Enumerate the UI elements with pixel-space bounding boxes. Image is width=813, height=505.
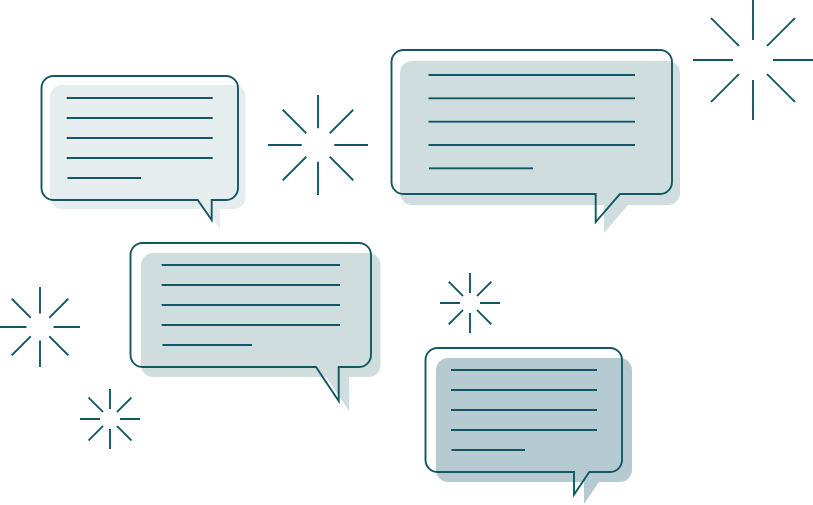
sparkle: centre top (268, 95, 368, 195)
bubble outline (130, 243, 371, 401)
sparkle: bottom left small (80, 389, 140, 449)
bubble shadow (436, 358, 632, 504)
speech bubble: top centre, large (392, 50, 680, 233)
bubble outline (392, 50, 672, 222)
sparkle: left (0, 287, 80, 367)
speech bubble: bottom right, darkest (426, 348, 632, 504)
bubble shadow (400, 61, 680, 233)
bubble shadow (141, 253, 380, 411)
bubble outline (42, 76, 238, 220)
text lines (67, 98, 213, 178)
sparkle: centre small (440, 273, 500, 333)
speech bubble: centre left (130, 243, 380, 411)
text lines (451, 370, 597, 450)
sparkle: top right (693, 0, 813, 120)
bubble shadow (50, 85, 246, 229)
speech bubble: top left, lightest (42, 76, 246, 229)
bubble outline (426, 348, 622, 495)
text lines (428, 75, 635, 168)
text lines (162, 265, 340, 345)
